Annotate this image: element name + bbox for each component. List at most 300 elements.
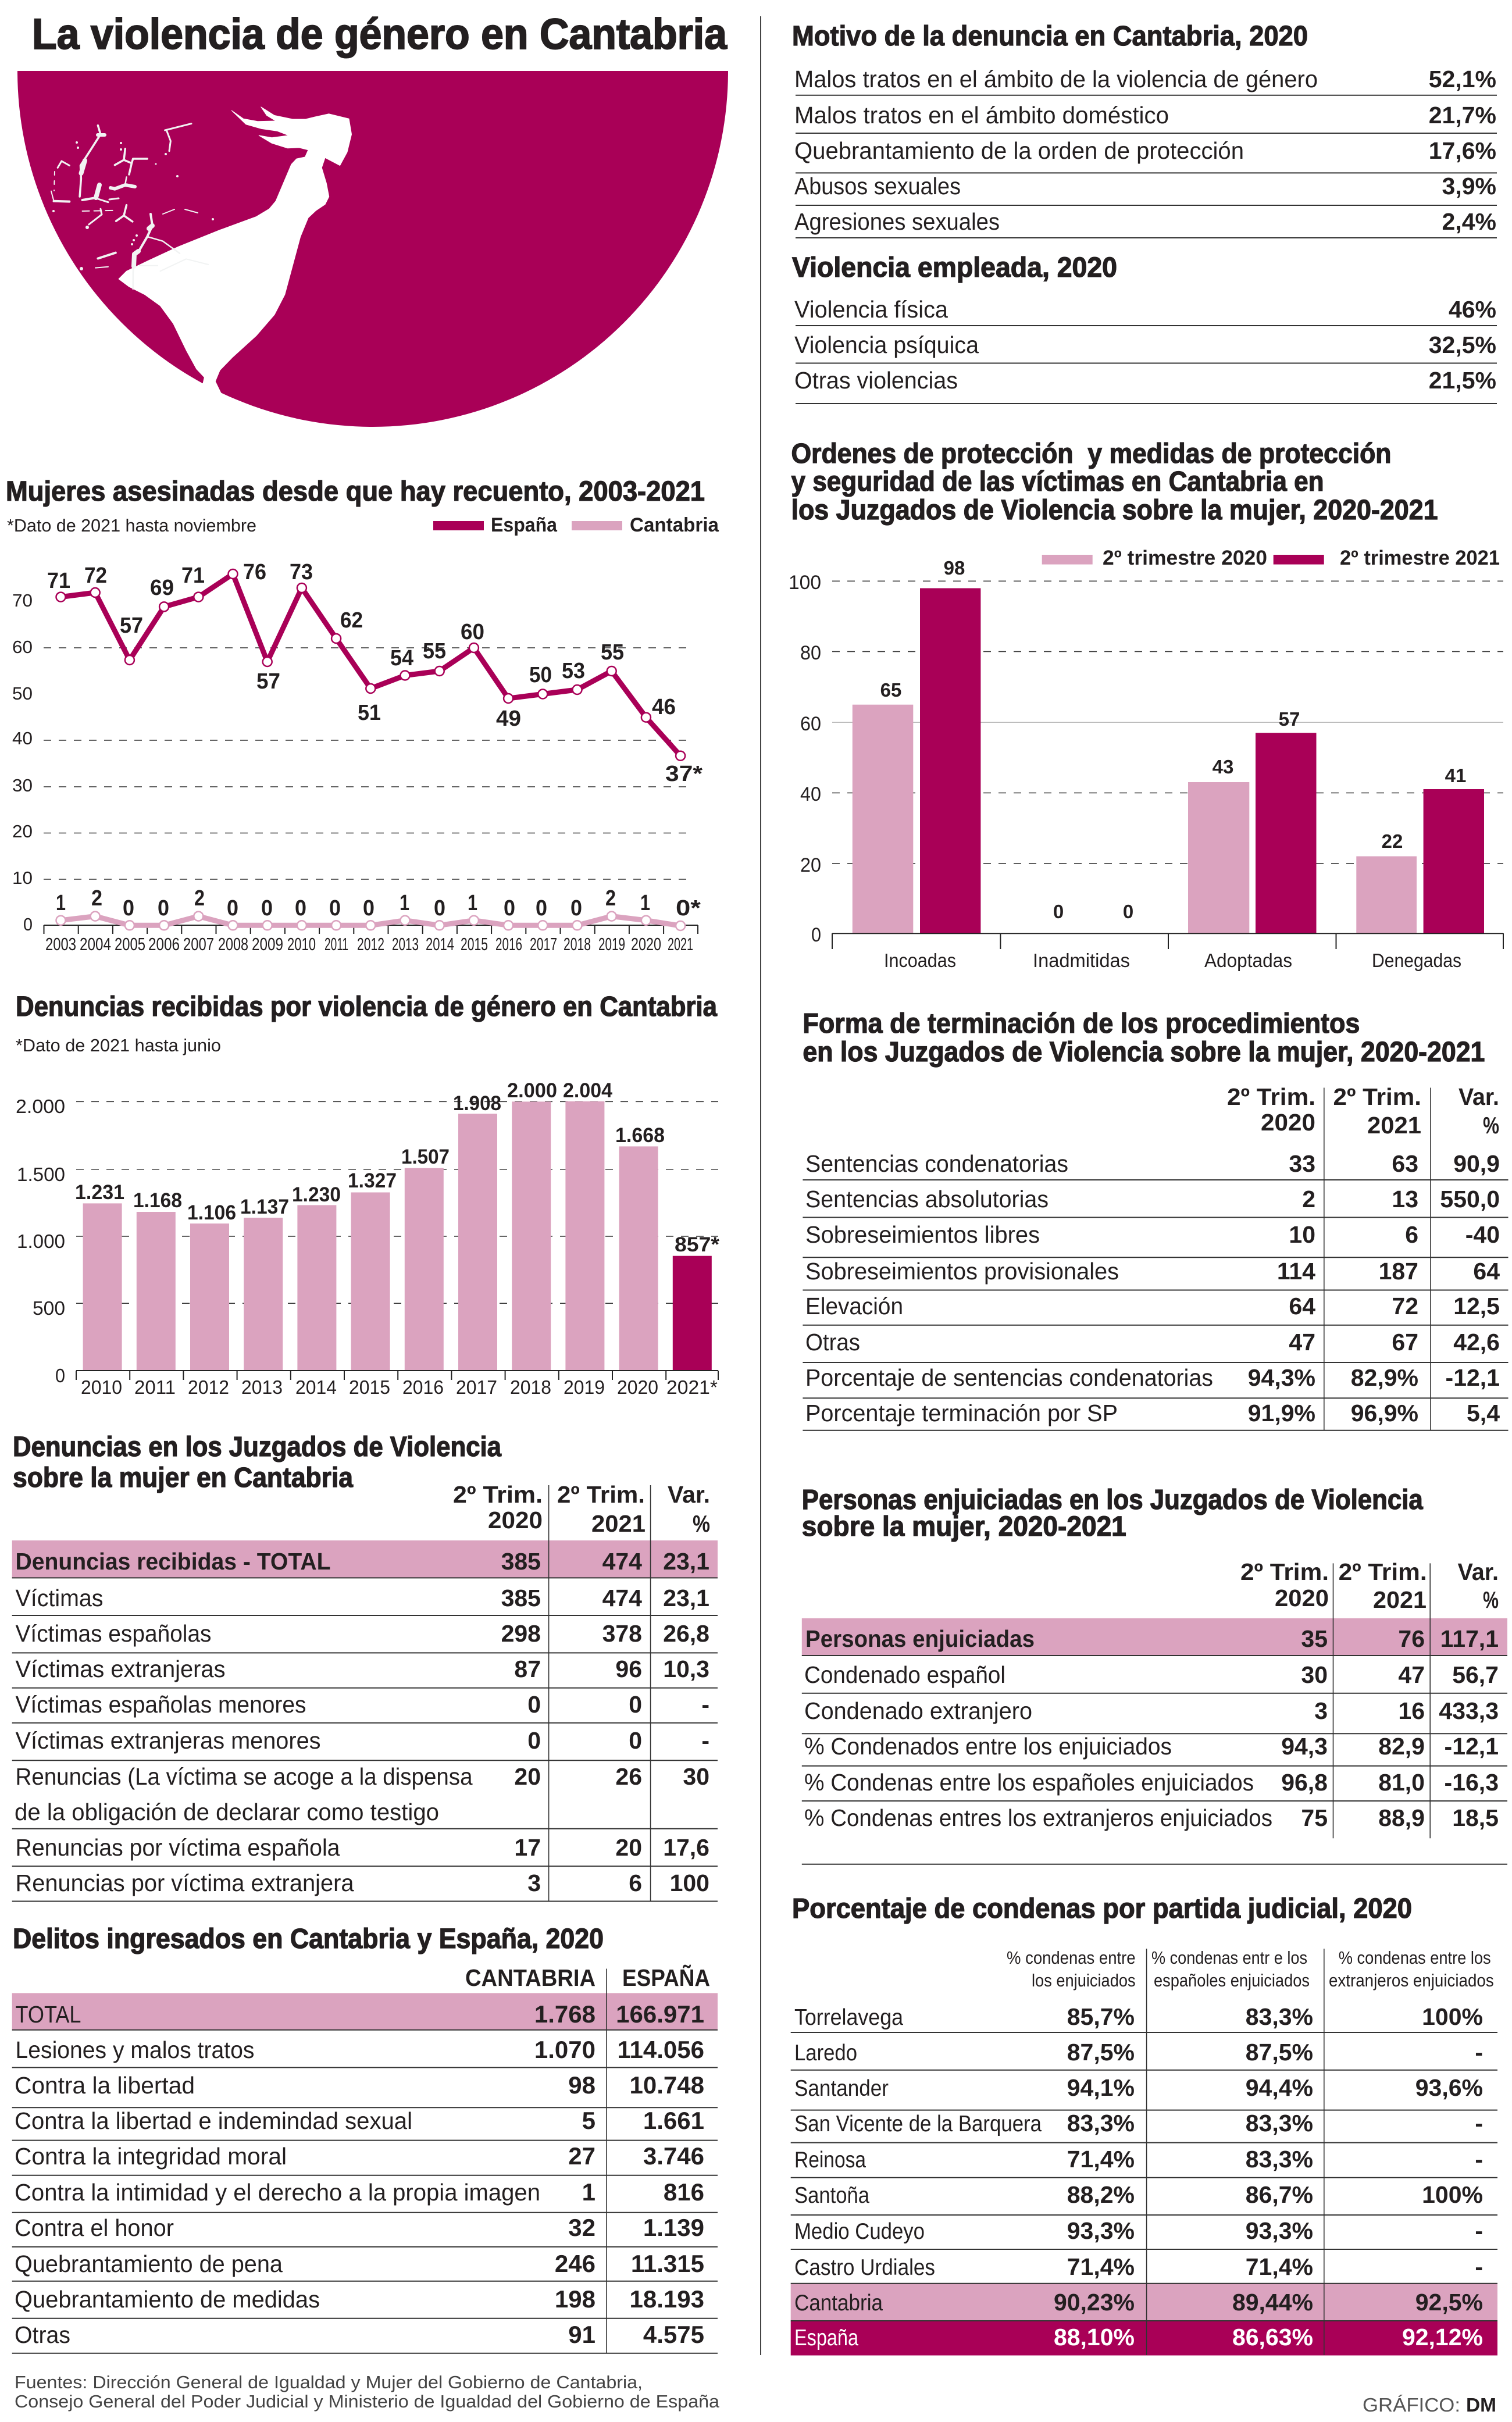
- data labels Cantabria: 1: [640, 891, 650, 915]
- rows: Quebrantamiento de medidas: [15, 2286, 320, 2313]
- rows: 26,8: [663, 1620, 709, 1647]
- rows: 3.746: [643, 2142, 704, 2170]
- rows: España: [794, 2325, 858, 2350]
- data labels Cantabria: 1: [400, 891, 409, 915]
- rows: 2: [1302, 1186, 1315, 1212]
- column headers: 2º Trim.: [1333, 1083, 1421, 1110]
- rows: Víctimas: [15, 1585, 104, 1611]
- y axis labels: 40: [12, 728, 33, 748]
- panel: table denuncias en juzgados: [12, 1432, 718, 1902]
- rows: % Condenas entres los extranjeros enjuiciados: [804, 1804, 1272, 1831]
- rows: 93,3%: [1246, 2217, 1313, 2244]
- heading: Forma de terminación de los procedimientos: [803, 1008, 1360, 1039]
- x axis years: 2021*: [666, 1376, 718, 1398]
- bar values: 41: [1445, 765, 1466, 786]
- rows: 56,7: [1452, 1661, 1499, 1688]
- column headers: Var.: [1457, 1558, 1499, 1585]
- data labels Cantabria: 0: [227, 896, 238, 921]
- rows: 83,3%: [1246, 2110, 1313, 2136]
- x axis years: 2020: [617, 1376, 658, 1398]
- rows: 94,4%: [1246, 2074, 1313, 2101]
- rows: Malos tratos en el ámbito doméstico: [794, 102, 1169, 129]
- panel: table delitos ingresados: [12, 1924, 718, 2353]
- rows: 64: [1289, 1293, 1315, 1319]
- data labels Cantabria: 1: [56, 891, 66, 915]
- rows: Otras: [805, 1329, 860, 1356]
- bar values: 2.004: [563, 1079, 613, 1102]
- rows: 0: [629, 1727, 642, 1754]
- rows: 0: [527, 1727, 541, 1754]
- rows: 1.070: [534, 2036, 595, 2063]
- rows: 17,6: [663, 1834, 709, 1861]
- rows: 13: [1392, 1186, 1418, 1212]
- heading: y seguridad de las víctimas en Cantabria en: [791, 466, 1324, 497]
- rows: de la obligación de declarar como testigo: [15, 1799, 439, 1825]
- column headers: 2º Trim.: [1240, 1558, 1329, 1585]
- rows: 4.575: [643, 2321, 704, 2348]
- column headers: 2020: [1261, 1109, 1315, 1136]
- data labels Cantabria: 0*: [676, 896, 701, 921]
- bar values: 1.668: [615, 1124, 665, 1147]
- column headers: 2º Trim.: [453, 1481, 543, 1508]
- rows: San Vicente de la Barquera: [794, 2111, 1042, 2136]
- rows: Violencia física: [794, 296, 948, 323]
- rows: 3: [1314, 1697, 1328, 1724]
- data labels Cantabria: 0: [504, 896, 515, 921]
- Cantabria row background: [791, 2284, 1497, 2321]
- column headers: 2021: [591, 1510, 646, 1537]
- rows: 90,9: [1453, 1150, 1500, 1177]
- column headers: 2º Trim.: [1339, 1558, 1427, 1585]
- column headers: los enjuiciados: [1032, 1970, 1136, 1991]
- y axis labels: 30: [12, 775, 33, 796]
- data labels Cantabria: 0: [570, 896, 582, 921]
- bar values: 1.507: [401, 1146, 450, 1168]
- data labels España: 50: [529, 663, 552, 687]
- rows: 3: [527, 1870, 541, 1896]
- x axis years: 2016: [495, 934, 522, 954]
- rows: Sentencias absolutorias: [805, 1186, 1049, 1212]
- data labels Cantabria: 0: [434, 896, 445, 921]
- highlight row background: [12, 1540, 718, 1578]
- rows: 63: [1392, 1150, 1418, 1177]
- bar values: 1.168: [133, 1189, 182, 1212]
- rows: 10.748: [630, 2071, 704, 2099]
- rows: 64: [1473, 1258, 1500, 1285]
- data labels España: 69: [150, 576, 174, 600]
- data labels España: 71: [47, 569, 70, 593]
- x axis years: 2019: [598, 934, 625, 954]
- rows: [794, 296, 1496, 394]
- rows: 23,1: [663, 1548, 709, 1575]
- rows: 21,7%: [1429, 102, 1496, 129]
- rows: 100%: [1422, 2003, 1483, 2030]
- x axis years: 2010: [287, 934, 316, 954]
- rows: 90,23%: [1054, 2289, 1135, 2316]
- rows: 100: [670, 1870, 709, 1896]
- x axis years: 2013: [392, 934, 419, 954]
- rows: 17: [514, 1834, 541, 1861]
- rows: 5,4: [1467, 1400, 1500, 1426]
- rows: 18.193: [630, 2285, 704, 2313]
- rows: 12,5: [1453, 1293, 1500, 1319]
- heading: Denuncias en los Juzgados de Violencia: [13, 1432, 501, 1463]
- data labels Cantabria: 2: [605, 886, 616, 911]
- rows: Porcentaje de sentencias condenatorias: [805, 1364, 1213, 1391]
- rows: 474: [602, 1585, 642, 1611]
- data labels España: 76: [243, 560, 266, 584]
- x axis years: 2019: [564, 1376, 605, 1398]
- series: España: [56, 569, 685, 761]
- x axis years: 2011: [134, 1376, 176, 1398]
- bar values: 2.000: [507, 1079, 557, 1102]
- bars: [83, 1101, 712, 1371]
- data labels Cantabria: 0: [363, 896, 375, 921]
- x axis years: 2014: [295, 1376, 337, 1398]
- rows: 1.661: [643, 2107, 704, 2134]
- column divider: [760, 16, 761, 2355]
- rows: Víctimas españolas menores: [15, 1691, 306, 1718]
- rows: 92,12%: [1402, 2324, 1483, 2350]
- rows: Malos tratos en el ámbito de la violencia de género: [794, 66, 1318, 92]
- sources note: Fuentes: Dirección General de Igualdad y Mujer del Gobierno de Cantabria,: [15, 2372, 643, 2392]
- panel: table personas enjuiciadas: [802, 1485, 1507, 1864]
- rows: -12,1: [1445, 1733, 1499, 1760]
- column headers: 2º Trim.: [1227, 1083, 1315, 1110]
- bar values: 65: [880, 679, 901, 701]
- heading: [791, 438, 1438, 526]
- y axis labels: 80: [800, 642, 821, 664]
- heading: los Juzgados de Violencia sobre la mujer, 2020-2021: [791, 495, 1438, 526]
- rows: 86,63%: [1232, 2324, 1313, 2350]
- bar values: 1.137: [240, 1196, 289, 1218]
- x axis years: [81, 1376, 718, 1398]
- data labels Cantabria: 0: [295, 896, 306, 921]
- rows: 81,0: [1378, 1769, 1425, 1796]
- column headers: [1240, 1558, 1499, 1613]
- y axis labels: 100: [789, 572, 821, 594]
- rows: [805, 1150, 1500, 1426]
- rows: -: [1475, 2217, 1483, 2244]
- data labels Cantabria: 0: [158, 896, 169, 921]
- column headers: % condenas entre: [1007, 1947, 1136, 1968]
- y axis labels: 0: [55, 1365, 65, 1386]
- highlight row background: [12, 1993, 718, 2030]
- rows: 20: [514, 1763, 541, 1790]
- data labels Cantabria: 0: [123, 896, 134, 921]
- column headers: % condenas entr e los: [1151, 1947, 1307, 1968]
- x axis years: 2017: [530, 934, 557, 954]
- data labels Cantabria: 2: [194, 886, 205, 911]
- rows: 87,5%: [1067, 2039, 1135, 2066]
- y axis labels: 50: [12, 683, 33, 704]
- rows: Porcentaje terminación por SP: [805, 1400, 1118, 1426]
- rows: 114.056: [617, 2036, 704, 2063]
- legend: España: [491, 514, 558, 536]
- legend: 2º trimestre 2021: [1340, 547, 1500, 569]
- panel: bar chart denuncias recibidas: [16, 991, 719, 1398]
- rows: Condenado español: [804, 1661, 1005, 1688]
- category labels: Incoadas: [884, 950, 956, 971]
- rows: 27: [568, 2142, 595, 2170]
- x axis years: 2011: [324, 934, 348, 954]
- y axis labels: 500: [33, 1297, 65, 1319]
- category labels: [884, 950, 1461, 971]
- panel: violencia empleada: [792, 252, 1497, 404]
- note: *Dato de 2021 hasta junio: [16, 1035, 221, 1055]
- rows: Renuncias por víctima extranjera: [15, 1870, 354, 1896]
- column headers: 2020: [1275, 1585, 1329, 1611]
- rows: 474: [602, 1548, 642, 1575]
- rows: 42,6: [1453, 1329, 1500, 1356]
- bar values: 1.231: [75, 1181, 124, 1204]
- rows: 71,4%: [1067, 2253, 1135, 2280]
- data labels España: 60: [461, 620, 484, 644]
- rows: 94,3: [1281, 1733, 1328, 1760]
- rows: Medio Cudeyo: [794, 2219, 925, 2244]
- data labels España: 73: [290, 560, 313, 584]
- rows: 94,3%: [1248, 1364, 1315, 1391]
- rows: Quebrantamiento de pena: [15, 2250, 283, 2277]
- rows: 91: [568, 2321, 595, 2348]
- column headers: españoles enjuiciados: [1154, 1970, 1310, 1991]
- x axis years: 2009: [252, 934, 283, 954]
- rows: 30: [683, 1763, 709, 1790]
- column headers: Var.: [1458, 1083, 1499, 1110]
- y axis labels: [12, 590, 33, 934]
- data labels España: 54: [390, 646, 413, 670]
- x axis years: 2013: [241, 1376, 283, 1398]
- rows: Santoña: [794, 2183, 869, 2208]
- rows: 93,3%: [1067, 2217, 1135, 2244]
- heading: sobre la mujer en Cantabria: [13, 1463, 353, 1493]
- panel: table forma de terminación: [803, 1008, 1509, 1431]
- rows: 11.315: [631, 2250, 704, 2277]
- rows: 10,3: [663, 1656, 709, 1682]
- heading: Denuncias recibidas por violencia de género en Cantabria: [16, 991, 717, 1022]
- rows: 1.139: [643, 2214, 704, 2241]
- rows: 198: [555, 2285, 595, 2313]
- bar values: 1.327: [348, 1169, 397, 1192]
- x axis years: [45, 934, 693, 954]
- y axis labels: 40: [800, 783, 821, 805]
- rows: 1.768: [534, 2000, 595, 2028]
- rows: 98: [568, 2071, 595, 2099]
- rows: Contra la libertad e indemindad sexual: [15, 2107, 412, 2134]
- category labels: Denegadas: [1372, 950, 1461, 971]
- rows: 33: [1289, 1150, 1315, 1177]
- rows: 87,5%: [1246, 2039, 1313, 2066]
- rows: 86,7%: [1246, 2181, 1313, 2208]
- rows: 6: [629, 1870, 642, 1896]
- rows: [804, 1625, 1499, 1831]
- rows: Reinosa: [794, 2148, 866, 2173]
- rows: 96: [615, 1656, 642, 1682]
- column headers: 2021: [1373, 1586, 1427, 1613]
- category labels: Adoptadas: [1204, 950, 1292, 971]
- x axis years: 2005: [115, 934, 145, 954]
- x axis years: 2010: [81, 1376, 122, 1398]
- credit: DM: [1466, 2394, 1496, 2416]
- column headers: 2020: [488, 1507, 543, 1533]
- rows: 298: [501, 1620, 541, 1647]
- rows: 0: [629, 1691, 642, 1718]
- rows: [15, 1548, 709, 1896]
- rows: -: [1475, 2253, 1483, 2280]
- rows: 3,9%: [1442, 173, 1496, 199]
- bar values: 98: [944, 557, 965, 579]
- rows: Contra la integridad moral: [15, 2143, 287, 2170]
- heading: sobre la mujer, 2020-2021: [802, 1511, 1126, 1542]
- data labels Cantabria: [56, 886, 701, 921]
- x axis years: 2015: [349, 1376, 390, 1398]
- legend: [1042, 547, 1500, 569]
- rows: 166.971: [616, 2000, 704, 2028]
- rows: 23,1: [663, 1585, 709, 1611]
- x axis years: 2018: [564, 934, 591, 954]
- series: Cantabria: [56, 912, 685, 930]
- rows: Renuncias por víctima española: [15, 1834, 340, 1861]
- rows: 117,1: [1440, 1625, 1499, 1652]
- rows: Contra la libertad: [15, 2072, 195, 2099]
- panel: bar chart órdenes de protección: [789, 438, 1503, 971]
- x axis years: 2021: [668, 934, 693, 954]
- rows: 18,5: [1452, 1804, 1499, 1831]
- data labels España: 72: [84, 563, 107, 588]
- heading: [802, 1485, 1423, 1542]
- heading: Personas enjuiciadas en los Juzgados de Violencia: [802, 1485, 1423, 1515]
- credit: GRÁFICO:: [1363, 2394, 1460, 2416]
- data labels Cantabria: 0: [329, 896, 341, 921]
- title: La violencia de género en Cantabria: [32, 10, 728, 58]
- rows: 385: [501, 1585, 541, 1611]
- rows: 0: [527, 1691, 541, 1718]
- rows: 47: [1289, 1329, 1315, 1356]
- heading: Porcentaje de condenas por partida judicial, 2020: [792, 1893, 1412, 1924]
- rows: -: [1475, 2146, 1483, 2173]
- bar values: 43: [1213, 756, 1233, 777]
- rows: Agresiones sexuales: [794, 208, 1000, 235]
- highlight row background: [802, 1618, 1507, 1656]
- rows: 93,6%: [1415, 2074, 1483, 2101]
- rows: Víctimas extranjeras menores: [15, 1727, 321, 1754]
- rows: Abusos sexuales: [794, 173, 961, 199]
- rows: [794, 2003, 1483, 2350]
- x axis years: 2015: [461, 934, 488, 954]
- rows: 71,4%: [1067, 2146, 1135, 2173]
- rows: 816: [664, 2178, 704, 2206]
- rows: 1: [582, 2178, 595, 2206]
- heading: [13, 1432, 501, 1493]
- rows: Elevación: [805, 1293, 903, 1319]
- rows: 6: [1405, 1221, 1418, 1248]
- sources note: Consejo General del Poder Judicial y Ministerio de Igualdad del Gobierno de España: [15, 2391, 720, 2412]
- note: *Dato de 2021 hasta noviembre: [7, 515, 256, 536]
- rows: 32: [568, 2214, 595, 2241]
- heading: Violencia empleada, 2020: [792, 252, 1117, 283]
- data labels España: 55: [601, 640, 624, 665]
- rows: 88,2%: [1067, 2181, 1135, 2208]
- rows: 96,9%: [1351, 1400, 1418, 1426]
- rows: 85,7%: [1067, 2003, 1135, 2030]
- data labels España: [47, 560, 702, 786]
- rows: -: [701, 1691, 709, 1718]
- rows: 47: [1398, 1661, 1425, 1688]
- rows: 89,44%: [1232, 2289, 1313, 2316]
- rows: 433,3: [1439, 1697, 1499, 1724]
- rows: Cantabria: [794, 2291, 883, 2316]
- data labels España: 57: [256, 669, 280, 694]
- rows: [794, 66, 1496, 235]
- rows: Sentencias condenatorias: [805, 1150, 1068, 1177]
- rows: 187: [1379, 1258, 1418, 1285]
- legend: 2º trimestre 2020: [1103, 547, 1267, 569]
- rows: 67: [1392, 1329, 1418, 1356]
- column headers: [1227, 1083, 1499, 1139]
- column headers: 2021: [1367, 1112, 1421, 1139]
- bar values: 0: [1053, 901, 1064, 922]
- column headers: CANTABRIA: [465, 1964, 595, 1991]
- heading: [803, 1008, 1485, 1068]
- y axis labels: 10: [12, 868, 33, 888]
- x axis years: 2012: [188, 1376, 229, 1398]
- y axis labels: 1.500: [17, 1164, 65, 1185]
- column headers: [465, 1964, 710, 1991]
- rows: % Condenas entre los españoles enjuiciados: [804, 1769, 1254, 1796]
- bar values: [75, 1079, 719, 1256]
- rows: Santander: [794, 2076, 889, 2101]
- rows: Condenado extranjero: [804, 1697, 1032, 1724]
- rows: -40: [1465, 1221, 1500, 1248]
- x axis years: 2014: [426, 934, 454, 954]
- illustration: woman silhouette on shield: [17, 71, 728, 427]
- y axis labels: 60: [800, 713, 821, 735]
- y axis labels: 70: [12, 590, 33, 611]
- rows: 26: [615, 1763, 642, 1790]
- y axis labels: 0: [23, 914, 33, 934]
- y axis labels: 1.000: [17, 1230, 65, 1252]
- panel: motivo de la denuncia: [792, 21, 1497, 238]
- heading: Motivo de la denuncia en Cantabria, 2020: [792, 21, 1308, 52]
- rows: 83,3%: [1067, 2110, 1135, 2136]
- legend: [433, 514, 719, 536]
- rows: Denuncias recibidas - TOTAL: [15, 1548, 330, 1575]
- data labels Cantabria: 2: [91, 886, 102, 911]
- rows: 71,4%: [1246, 2253, 1313, 2280]
- panel: line chart mujeres asesinadas: [6, 476, 719, 954]
- data labels Cantabria: 1: [468, 891, 477, 915]
- rows: 378: [602, 1620, 642, 1647]
- rows: Sobreseimientos provisionales: [805, 1258, 1119, 1285]
- rows: 72: [1392, 1293, 1418, 1319]
- data labels España: 71: [181, 563, 205, 588]
- rows: 94,1%: [1067, 2074, 1135, 2101]
- rows: 17,6%: [1429, 137, 1496, 164]
- column headers: %: [693, 1510, 710, 1537]
- data labels España: 49: [496, 707, 521, 731]
- rows: Víctimas extranjeras: [15, 1656, 226, 1682]
- rows: 2,4%: [1442, 208, 1496, 235]
- y axis labels: [789, 572, 821, 946]
- legend: Cantabria: [630, 514, 719, 536]
- rows: -: [701, 1727, 709, 1754]
- rows: 76: [1398, 1625, 1425, 1652]
- rows: Contra el honor: [15, 2214, 174, 2241]
- rows: 92,5%: [1415, 2289, 1483, 2316]
- y axis labels: 20: [800, 854, 821, 876]
- column headers: %: [1483, 1586, 1499, 1613]
- rows: Castro Urdiales: [794, 2255, 935, 2280]
